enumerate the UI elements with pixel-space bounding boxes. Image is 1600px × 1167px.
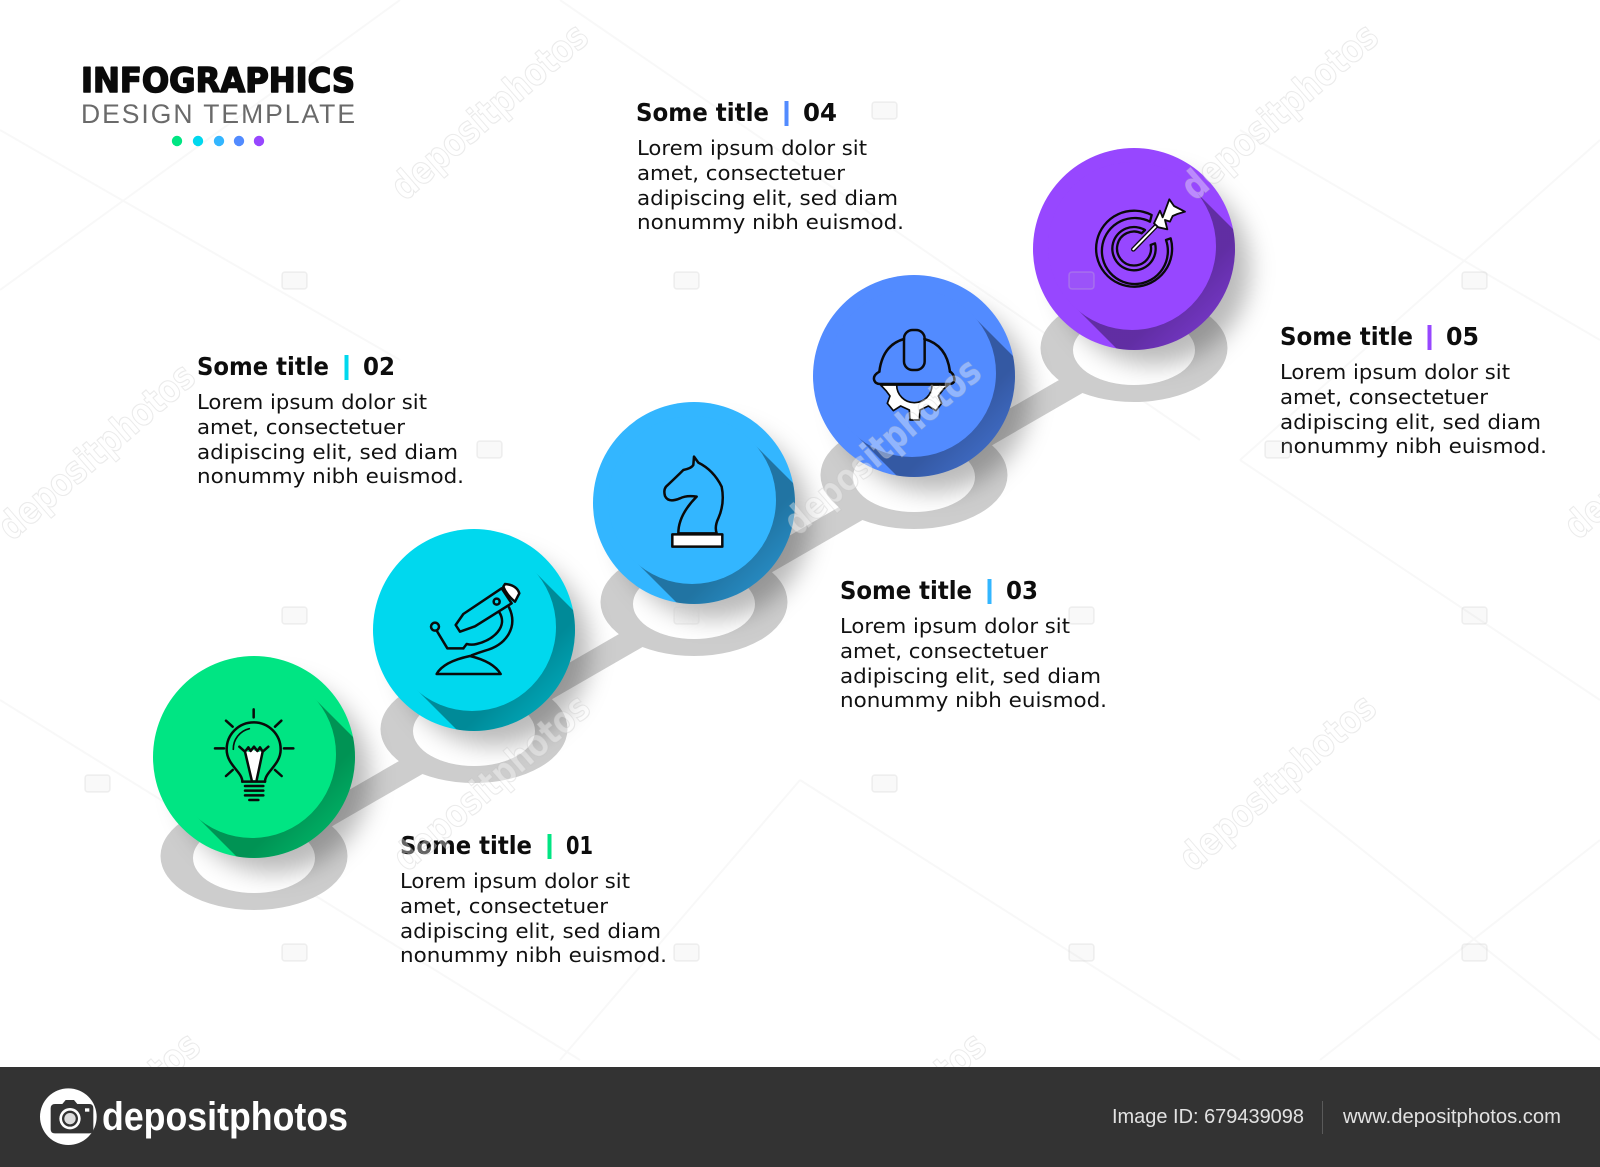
color dots <box>172 136 264 146</box>
step 2 marker: cyan circle with microscope <box>373 529 575 731</box>
title: step 3: Some title <box>840 576 972 605</box>
body: step 1: Lorem ipsum dolor sit <box>400 869 630 893</box>
subheading: DESIGN TEMPLATE <box>81 99 355 129</box>
text block: step 4 <box>636 98 904 234</box>
icon: microscope <box>431 584 519 674</box>
step 3 marker: sky blue circle with chess knight <box>593 402 795 604</box>
step 1 marker: green circle with bulb <box>153 656 355 858</box>
body: step 5: nonummy nibh euismod. <box>1280 434 1547 458</box>
body: step 3: nonummy nibh euismod. <box>840 688 1107 712</box>
body: step 3: Lorem ipsum dolor sit <box>840 614 1070 638</box>
header: infographics title <box>81 61 355 146</box>
divider bar: step 4 <box>784 101 788 126</box>
body: step 4: amet, consectetuer <box>637 161 846 185</box>
body: step 2: Lorem ipsum dolor sit <box>197 390 427 414</box>
body: step 1: amet, consectetuer <box>400 894 609 918</box>
icon: target and arrow <box>1096 199 1185 287</box>
title: step 5: Some title <box>1280 322 1413 351</box>
watermark text: depositphotos <box>775 349 990 544</box>
body: step 1: adipiscing elit, sed diam <box>400 919 661 943</box>
watermark text: depositphotos <box>384 685 599 880</box>
number: step 5: 05 <box>1446 322 1479 351</box>
body: step 4: Lorem ipsum dolor sit <box>637 136 867 160</box>
text block: step 2 <box>197 352 464 488</box>
body: step 4: nonummy nibh euismod. <box>637 210 904 234</box>
site url: www.depositphotos.com <box>1342 1106 1561 1128</box>
footer logo icon <box>40 1088 97 1145</box>
icon: chess knight <box>664 457 723 547</box>
divider bar: step 3 <box>988 579 992 604</box>
body: step 2: nonummy nibh euismod. <box>197 464 464 488</box>
body: step 4: adipiscing elit, sed diam <box>637 186 898 210</box>
divider bar: step 5 <box>1428 325 1432 350</box>
text block: step 3 <box>840 576 1107 712</box>
title: step 2: Some title <box>197 352 329 381</box>
text block: step 5 <box>1280 322 1547 458</box>
green disc <box>153 656 355 858</box>
heading: INFOGRAPHICS <box>81 61 355 101</box>
divider bar: step 1 <box>548 834 552 859</box>
body: step 1: nonummy nibh euismod. <box>400 943 667 967</box>
image id: Image ID: 679439098 <box>1112 1106 1304 1128</box>
body: step 5: amet, consectetuer <box>1280 385 1489 409</box>
icon: hard hat and gear <box>874 330 954 420</box>
sky blue disc <box>593 402 795 604</box>
text block: step 1 <box>400 831 667 967</box>
step 5 marker: purple circle with target <box>1033 148 1235 350</box>
number: step 2: 02 <box>363 352 395 381</box>
body: step 2: amet, consectetuer <box>197 415 406 439</box>
body: step 3: amet, consectetuer <box>840 639 1049 663</box>
watermark text: depositphotos <box>1170 685 1385 880</box>
number: step 3: 03 <box>1006 576 1038 605</box>
body: step 3: adipiscing elit, sed diam <box>840 664 1101 688</box>
divider bar: step 2 <box>344 355 348 380</box>
connecting path: isometric rings and links <box>160 294 1228 910</box>
number: step 4: 04 <box>803 98 837 127</box>
body: step 5: Lorem ipsum dolor sit <box>1280 360 1510 384</box>
icon: light bulb <box>215 709 293 800</box>
title: step 1: Some title <box>400 831 532 860</box>
footer bar <box>0 1067 1600 1167</box>
cyan disc <box>373 529 575 731</box>
blue disc <box>813 275 1015 477</box>
title: step 4: Some title <box>636 98 769 127</box>
purple disc <box>1033 148 1235 350</box>
step 4 marker: blue circle with helmet and gear <box>813 275 1015 477</box>
body: step 5: adipiscing elit, sed diam <box>1280 410 1541 434</box>
number: step 1: 01 <box>566 831 593 860</box>
body: step 2: adipiscing elit, sed diam <box>197 440 458 464</box>
footer logo wordmark: depositphotos <box>102 1095 348 1139</box>
